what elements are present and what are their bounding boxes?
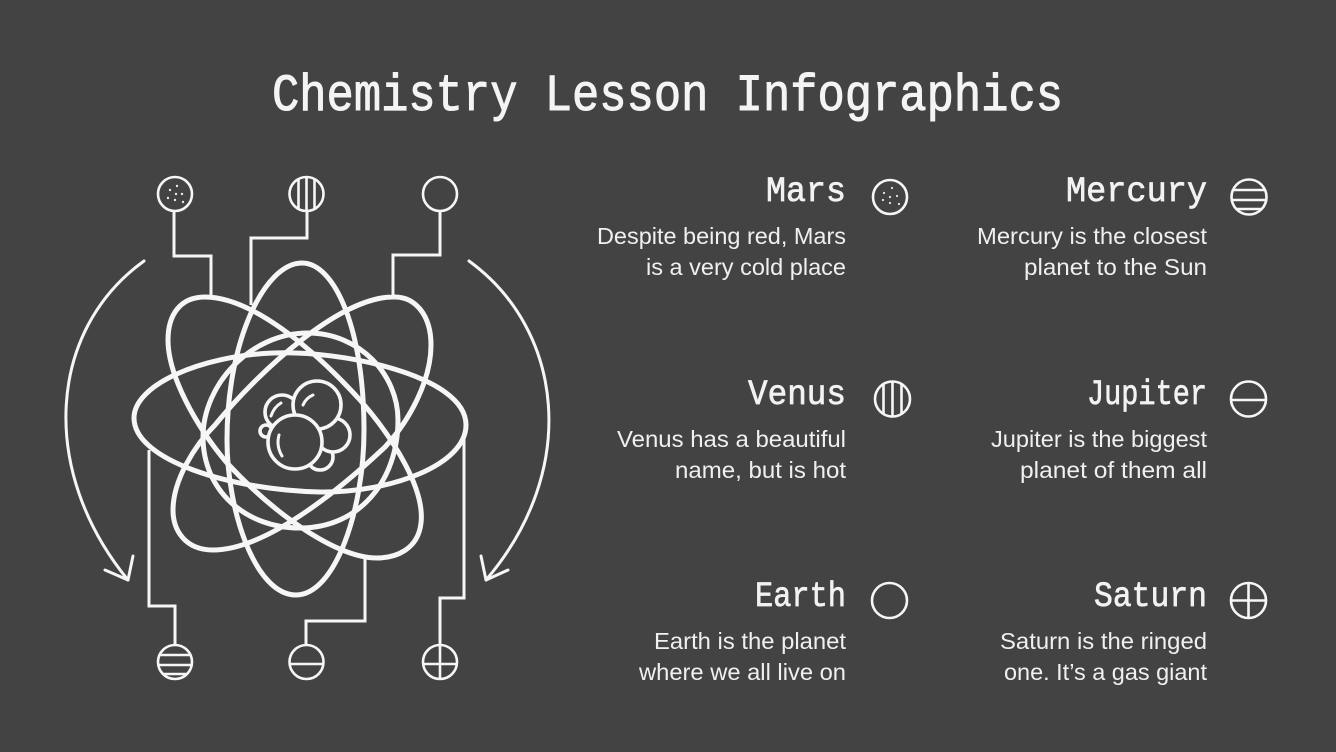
- text: Mercury description: Mercury is the closest: [977, 223, 1208, 249]
- diagram: atom with planets: [66, 177, 549, 679]
- block: Venus: [617, 375, 910, 483]
- text: Venus description: name, but is hot: [675, 457, 847, 483]
- heading: Mars: Mars: [766, 172, 846, 212]
- icon: Venus: [875, 382, 910, 416]
- heading: Mercury: Mercury: [1066, 172, 1207, 212]
- block: Mars: [597, 172, 907, 280]
- text: Earth description: Earth is the planet: [654, 628, 847, 654]
- icon: Venus small: [290, 177, 324, 211]
- icon: Mercury small: [158, 645, 192, 679]
- icon: Saturn: [1231, 583, 1266, 618]
- text: Mars description: [597, 223, 846, 280]
- left curved arrow: [66, 261, 144, 580]
- title: Chemistry Lesson Infographics: [272, 67, 1063, 126]
- text: Saturn description: one. It’s a gas giant: [1004, 659, 1208, 685]
- right curved arrow: [469, 261, 549, 580]
- text: Jupiter description: [991, 426, 1208, 483]
- text: Jupiter description: planet of them all: [1020, 457, 1207, 483]
- text: Mars description: is a very cold place: [646, 254, 846, 280]
- text: Saturn description: Saturn is the ringed: [1000, 628, 1207, 654]
- text: Jupiter description: Jupiter is the biggest: [991, 426, 1208, 452]
- icon: Jupiter: [1231, 382, 1266, 416]
- heading: Jupiter: Jupiter: [1087, 375, 1207, 415]
- text: Earth description: [638, 628, 847, 685]
- icon: Mars small: [158, 177, 192, 211]
- heading: Earth: Earth: [755, 577, 846, 617]
- text: Mercury description: [977, 223, 1208, 280]
- text: Saturn description: [1000, 628, 1208, 685]
- block: Jupiter: [991, 375, 1266, 483]
- icon: Jupiter small: [290, 645, 324, 679]
- icon: Mars: [873, 180, 907, 214]
- icon: Mercury: [1232, 180, 1266, 214]
- text: Mercury description: planet to the Sun: [1024, 254, 1207, 280]
- text: Venus description: [617, 426, 847, 483]
- heading: Venus: Venus: [748, 375, 846, 415]
- atom orbits: [134, 263, 466, 595]
- block: Mercury: [977, 172, 1266, 280]
- text: Mars description: Despite being red, Mars: [597, 223, 846, 249]
- block: Saturn: [1000, 577, 1266, 685]
- icon: Saturn small: [423, 645, 457, 679]
- connector lines: [149, 211, 464, 645]
- block: Earth: [638, 577, 907, 685]
- text: Venus description: Venus has a beautiful: [617, 426, 846, 452]
- text: Earth description: where we all live on: [638, 659, 846, 685]
- icon: Earth: [872, 583, 907, 618]
- atom nucleus: [260, 381, 350, 470]
- icon: Earth small: [423, 177, 457, 211]
- heading: Saturn: Saturn: [1094, 577, 1207, 617]
